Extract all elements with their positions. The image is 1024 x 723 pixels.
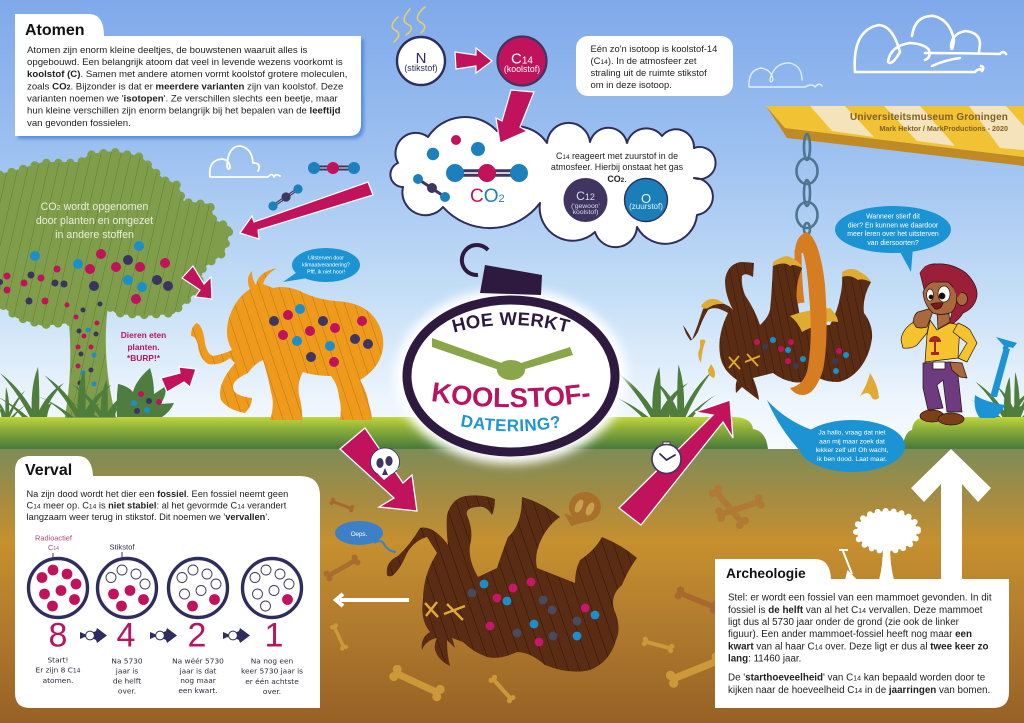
numbers 8 4 2 1: [49, 616, 283, 654]
Verval text block: Na zijn dood wordt het dier een fossiel. Een fossiel neemt geen: [26, 489, 288, 499]
Verval text block: [26, 489, 288, 522]
atom: N stikstof: N: [416, 50, 426, 67]
caption: quarter: Na wéér 5730: [172, 656, 224, 666]
caption: halfway: over.: [118, 686, 136, 696]
caption: Start: [36, 656, 81, 685]
arrow: C14 to cloud: [496, 90, 534, 143]
label: Radioactief C14: C14: [48, 543, 59, 552]
tree with CO2: [0, 150, 232, 420]
arrow: N to C14: [455, 48, 492, 73]
speech bubble: mammoth: Uitsterven door: [308, 256, 344, 262]
caption: quarter: een kwart.: [178, 686, 218, 695]
Archeologie text block: fossiel is de helft van al het C14 vervallen. Deze mammoet: [728, 605, 983, 616]
Atomen text block: opgebouwd. Een belangrijk atoom dat veel in levende wezens voorkomt is: [27, 57, 343, 68]
Archeologie text block: figuur). Een ander mammoet-fossiel heeft nog maar een: [728, 629, 972, 640]
clock face: [407, 300, 615, 452]
speech bubble: Oeps: [335, 521, 396, 552]
caption: halfway: jaar is: [115, 666, 138, 676]
speech bubble: Ja hallo: aan mij maar zoek dat: [819, 438, 885, 446]
text: C14 reageert: C14 reageert met zuurstof in de: [556, 151, 678, 161]
numbers 8 4 2 1: 4: [117, 616, 135, 654]
hanging body: [683, 262, 872, 400]
arrow: fossil to dating: [619, 400, 733, 525]
clock crown: [462, 245, 542, 295]
speech bubble: Ja hallo: ik ben dood. Laat maar.: [817, 456, 887, 463]
Archeologie text block: De 'starthoeveelheid' van C14 kan bepaald worden door te: [728, 672, 986, 684]
numbers 8 4 2 1: 8: [49, 616, 67, 654]
label: Stikstof: [110, 542, 135, 568]
shirt emblem: [929, 336, 941, 355]
hair back: [920, 264, 977, 328]
caption: Start: Start!: [47, 656, 69, 664]
caption: halfway: Na 5730: [111, 656, 143, 666]
ear: [956, 292, 968, 306]
text box: isotoop: om in deze isotoop.: [590, 79, 672, 90]
caption: eighth: er één achtste: [245, 677, 299, 686]
caption: eighth: over.: [263, 687, 281, 696]
Atomen text block: van gevonden fossielen.: [27, 118, 131, 129]
atom: C12: C12: [576, 189, 595, 203]
dead mammoth fossil: [386, 495, 637, 672]
caption: quarter: [172, 656, 224, 695]
atom: O zuurstof: [624, 178, 668, 222]
speech bubble: Wanneer stierf: dier? En kunnen we daardoor: [848, 222, 939, 230]
text box: isotoop: [576, 36, 733, 96]
Verval text block: langzaam weer terug in stikstof. Dit noemen we 'vervallen'.: [26, 512, 270, 522]
Atomen text block: koolstof (C). Samen met andere atomen vormt koolstof grotere moleculen,: [27, 69, 347, 80]
free molecule: blue dark blue: [268, 184, 303, 211]
sky background: [0, 0, 1024, 452]
caption: quarter: jaar is dat: [179, 666, 217, 676]
speech bubble: Wanneer stierf: meer leren over het uitsterven: [847, 231, 939, 238]
heading: Archeologie: Archeologie: [726, 566, 806, 581]
text: C14 reageert: [551, 151, 684, 184]
panel: Atomen: [15, 14, 364, 139]
icon: shovel: [975, 337, 1017, 418]
label: Radioactief C14: [35, 534, 73, 568]
hair fringe: [920, 265, 964, 297]
title: DATERING?: DATERING?: [461, 414, 560, 432]
text: CO2 opgenomen: CO2 wordt opgenomen: [41, 201, 149, 213]
shirt: [925, 320, 960, 362]
atom: O zuurstof: (zuurstof): [629, 202, 663, 211]
heading: Atomen: Atomen: [25, 22, 85, 39]
speech bubble: Wanneer stierf: [835, 206, 951, 272]
trousers: [923, 362, 962, 412]
panel shadow: [18, 39, 364, 139]
free molecule: blue red blue: [308, 162, 360, 174]
clock glow: [395, 288, 627, 464]
text: Dieren eten planten: [121, 330, 166, 363]
cloud: CO2: [390, 117, 716, 247]
speech bubble: Ja hallo: lekker zelf uit! Oh wacht,: [816, 447, 889, 454]
panel background: [15, 456, 320, 708]
white shovel icon: [839, 550, 855, 580]
text: Dieren eten planten: Dieren eten: [121, 330, 166, 340]
atom: C12: [564, 178, 608, 222]
atom: C14 koolstof: (koolstof): [504, 64, 540, 74]
text: Dieren eten planten: *BURP!*: [127, 353, 161, 363]
Archeologie text block: ligt dus al 5730 jaar onder de grond (zie ook de linker: [728, 617, 960, 628]
panel background: [15, 14, 361, 136]
label: Stikstof: Stikstof: [110, 542, 135, 552]
atom: C12: ('gewoon': [571, 203, 600, 210]
arrow: cloud to tree: [240, 182, 373, 239]
bones in the ground: [322, 483, 766, 704]
text: Dieren eten planten: planten.: [127, 342, 160, 352]
speech bubble: mammoth: Pfff, ik niet hoor!: [307, 270, 345, 276]
plant with atoms: [117, 368, 174, 417]
text box: isotoop: Eén zo'n isotoop is koolstof-14: [590, 43, 717, 54]
arrow: death to fossil: [340, 428, 417, 511]
underground background: [0, 449, 1024, 723]
decay circle 2: [168, 558, 228, 618]
decay circle 8: [28, 558, 88, 618]
title: KOOLSTOF-: KOOLSTOF-: [432, 382, 590, 408]
icon: stopwatch: [652, 442, 681, 474]
icon: skull: [370, 448, 401, 480]
eyes and mouth: [926, 286, 950, 309]
beam: Universiteitsmuseum: Universiteitsmuseum Groningen: [850, 112, 1008, 123]
speech bubble: mammoth: [283, 248, 360, 282]
speech bubble: Ja hallo: [767, 400, 905, 472]
text: C14 reageert: CO2.: [607, 174, 627, 184]
tree atoms: [0, 241, 173, 386]
caption: eighth: keer 5730 jaar is: [241, 666, 303, 676]
text box: isotoop: straling uit de ruimte stikstof: [590, 67, 707, 78]
white up arrow: [911, 449, 991, 580]
grass band: [0, 417, 1024, 449]
panel: Verval: [15, 456, 320, 708]
face: [923, 282, 957, 314]
speech bubble: mammoth: klimaatverandering?: [302, 262, 350, 268]
small arrows with stopwatch: [80, 628, 250, 643]
Atomen text block: zoals CO2. Bijzonder is dat er meerdere varianten zijn van koolstof. Deze: [27, 82, 343, 92]
skull in the ground: [564, 492, 601, 526]
CO2 molecules in cloud: [413, 135, 528, 202]
text: CO2 opgenomen: [36, 201, 153, 241]
numbers 8 4 2 1: 2: [188, 616, 206, 654]
speech bubble: Wanneer stierf: van diersoorten?: [867, 240, 919, 247]
caption: Start: Er zijn 8 C14: [36, 666, 81, 674]
Atomen text block: [27, 45, 347, 129]
character: girl: [901, 264, 977, 425]
caption: Start: atomen.: [43, 676, 73, 685]
text box: isotoop: (C14). In de atmosfeer zet: [590, 55, 697, 66]
Archeologie text block: lang: 11460 jaar.: [728, 654, 801, 664]
panel: Archeologie: [715, 559, 1009, 708]
icon: radiation wiggles: [392, 7, 425, 42]
hanging mammoth on ring: [683, 232, 879, 400]
orange mammoth: [191, 268, 384, 420]
atom: N stikstof: (stikstof): [404, 63, 438, 73]
label: CO2: CO2: [470, 186, 505, 207]
hands: [913, 308, 932, 328]
boots: [920, 410, 964, 425]
belt: [933, 362, 945, 369]
stopwatch title: [392, 243, 634, 472]
grass tufts: [0, 364, 1024, 417]
atom: C14 koolstof: [498, 36, 546, 86]
heading: Verval: Verval: [25, 462, 72, 479]
caption: halfway: de helft: [113, 676, 141, 686]
speech bubble: Oeps: Oeps.: [351, 531, 368, 538]
chain: [796, 134, 818, 235]
numbers 8 4 2 1: 1: [265, 616, 283, 654]
decay circle 4: [98, 558, 156, 618]
Atomen text block: Atomen zijn enorm kleine deeltjes, de bouwstenen waaruit alles is: [27, 45, 308, 56]
text: CO2 opgenomen: in andere stoffen: [55, 229, 134, 241]
ring back: [798, 250, 801, 303]
atom: N stikstof: [397, 37, 445, 85]
arrow: tree to mammoth: [182, 266, 212, 299]
right sleeve: [953, 323, 977, 362]
label: Radioactief C14: Radioactief: [35, 534, 73, 542]
clock hands: [432, 338, 573, 380]
caption: quarter: nog maar: [180, 676, 217, 685]
gold drips: [698, 256, 879, 400]
text: C14 reageert: atmosfeer. Hierbij onstaat het gas: [551, 162, 684, 172]
Atomen text block: varianten noemen we 'isotopen'. Ze verschillen slechts een beetje, maar: [27, 94, 339, 104]
atom: O zuurstof: O: [641, 191, 651, 206]
panel background: [715, 559, 1009, 708]
Verval text block: C14 meer op. C14 is niet stabiel: al het gevormde C14 verandert: [26, 500, 287, 510]
white tree icon: [856, 511, 918, 580]
Atomen text block: hun kleine verschillen zijn enorm belangrijk bij het bepalen van de leeftijd: [27, 106, 341, 116]
atom: C14 koolstof: C14: [511, 50, 533, 68]
tree silhouette: [0, 150, 232, 420]
speech bubble: Ja hallo: Ja hallo, vraag dat niet: [818, 430, 886, 436]
beam: Universiteitsmuseum: Mark Hektor / MarkProductions - 2020: [879, 124, 1008, 133]
decay circle 1: [242, 558, 302, 618]
title: HOE WERKT: HOE WERKT: [452, 312, 571, 332]
caption: eighth: Na nog een: [251, 656, 294, 666]
Archeologie text block: [728, 592, 992, 696]
caption: halfway: [111, 656, 143, 696]
speech bubble: Wanneer stierf: Wanneer stierf dit: [866, 214, 920, 220]
caption: eighth: [241, 656, 303, 696]
arrow: white left arrow: [336, 594, 409, 606]
ring front: [790, 232, 827, 395]
left sleeve: [901, 320, 930, 348]
clouds: [210, 16, 1006, 177]
Archeologie text block: Stel: er wordt een fossiel van een mammoet gevonden. In dit: [728, 592, 992, 604]
beam: Universiteitsmuseum: [766, 106, 1024, 166]
text: CO2 opgenomen: door planten en omgezet: [36, 215, 153, 227]
Archeologie text block: kijken naar de hoeveelheid C14 in de jaarringen van bomen.: [728, 685, 990, 696]
atom: C12: koolstof): [573, 209, 598, 216]
Archeologie text block: kwart van al haar C14 over. Deze ligt er dus al twee keer zo: [728, 642, 989, 652]
neck: [937, 312, 950, 329]
arrow: plant to mammoth: [161, 367, 196, 392]
